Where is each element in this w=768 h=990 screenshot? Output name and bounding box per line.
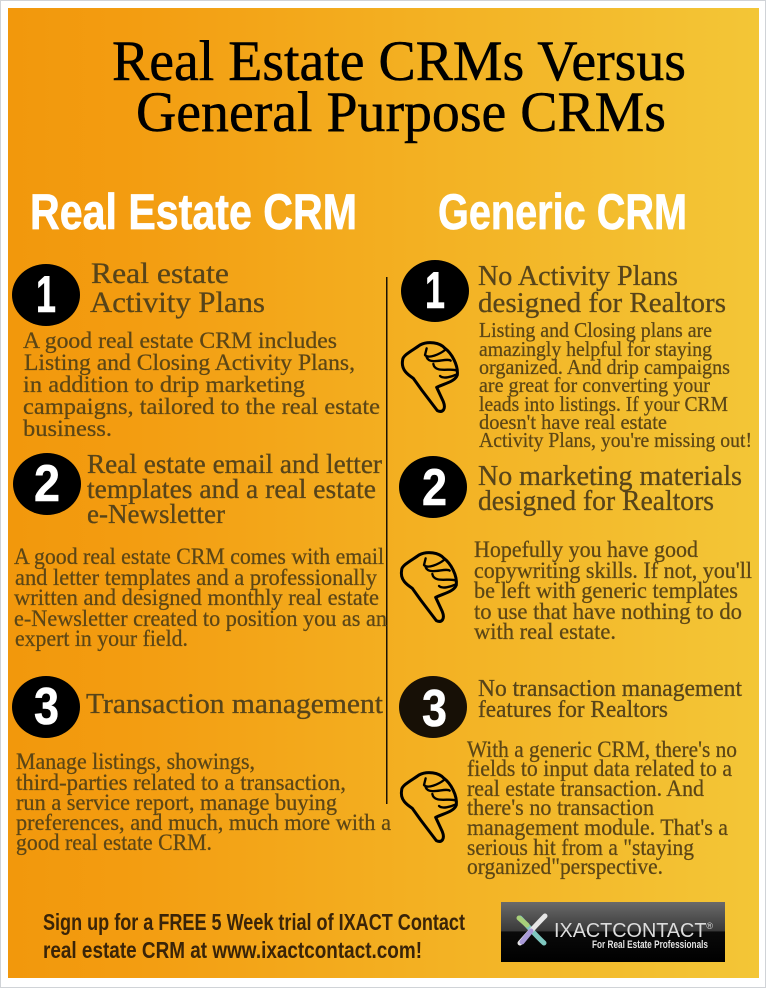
item text: expert in your field. [15, 626, 188, 651]
number badge 3 [12, 676, 80, 738]
item text: doesn't have real estate [479, 410, 667, 434]
item text: and letter templates and a professionally [15, 565, 377, 590]
item heading [90, 257, 265, 319]
item text: there's no transaction [467, 795, 654, 820]
item text: with real estate. [474, 619, 616, 644]
panel: real estate item 3 [12, 676, 391, 855]
panel: generic item 2 [399, 456, 752, 644]
item text: run a service report, manage buying [16, 790, 337, 815]
item text [16, 749, 391, 855]
item text: organized. And drip campaigns [479, 355, 730, 379]
item text: With a generic CRM, there's no [467, 737, 737, 762]
footer call to action: Sign up for a FREE 5 Week trial of IXACT Contact [43, 909, 465, 935]
item heading: templates and a real estate [87, 474, 376, 504]
item text: leads into listings. If your CRM [479, 392, 728, 416]
item heading: No marketing materials [478, 461, 742, 492]
item heading: designed for Realtors [478, 287, 726, 319]
number badge 3: 3 [422, 680, 447, 738]
item text: organized"perspective. [467, 854, 663, 879]
title: Real Estate CRMs Versus [112, 30, 686, 93]
item text: serious hit from a "staying [467, 835, 694, 860]
heading: Real Estate CRM: Real Estate CRM [30, 184, 357, 240]
panel: generic item 3 [399, 676, 742, 879]
item text [467, 737, 737, 879]
icon: colored X mark [519, 916, 545, 943]
item text: good real estate CRM. [16, 830, 212, 855]
item text: are great for converting your [479, 373, 710, 397]
icon: thumbs down [401, 553, 456, 621]
item text [474, 537, 752, 644]
item text: real estate transaction. And [467, 776, 704, 801]
item heading: e-Newsletter [87, 499, 225, 529]
icon: thumbs down [402, 343, 457, 411]
number badge 2: 2 [422, 459, 447, 517]
item text: in addition to drip marketing [23, 372, 306, 397]
footer call to action [43, 909, 465, 963]
item text: e-Newsletter created to position you as an [14, 606, 387, 631]
item text: Listing and Closing Activity Plans, [24, 350, 355, 375]
item text: business. [23, 416, 112, 441]
panel: generic item 1 [401, 260, 752, 452]
logo: IXACT Contact: IXACTCONTACT [554, 920, 708, 942]
item heading [478, 676, 742, 723]
number badge 1 [12, 264, 80, 326]
number badge 1 [401, 260, 469, 322]
number badge 2 [399, 456, 467, 518]
item text: Manage listings, showings, [16, 749, 255, 774]
number badge 1: 1 [36, 266, 56, 324]
item text: A good real estate CRM includes [23, 328, 337, 353]
number badge 1: 1 [425, 262, 445, 320]
panel: real estate item 2 [13, 449, 387, 651]
item heading: No Activity Plans [478, 260, 678, 292]
item text: third-parties related to a transaction, [16, 770, 346, 795]
item text: preferences, and much, much more with a [16, 810, 391, 835]
item heading: designed for Realtors [478, 486, 714, 517]
item heading [478, 260, 726, 319]
title [112, 30, 686, 144]
number badge 2: 2 [34, 455, 60, 513]
center divider line [386, 277, 388, 804]
item text [479, 318, 752, 452]
item heading: features for Realtors [478, 697, 668, 723]
panel: real estate item 1 [12, 257, 380, 441]
item heading [478, 461, 742, 517]
item text: copywriting skills. If not, you'll [474, 558, 752, 583]
item heading: No transaction management [478, 676, 742, 702]
item text: Hopefully you have good [474, 537, 698, 562]
item text [14, 544, 387, 651]
number badge 3: 3 [34, 678, 59, 736]
item text: be left with generic templates [474, 578, 738, 603]
item heading: Real estate email and letter [87, 449, 382, 479]
icon: thumbs down [401, 773, 456, 841]
number badge 2 [13, 453, 81, 515]
number badge 3 [399, 676, 467, 738]
item heading: Real estate [91, 257, 229, 290]
item text: amazingly helpful for staying [479, 337, 712, 361]
item text: campaigns, tailored to the real estate [23, 394, 380, 419]
item text: written and designed monthly real estate [14, 585, 379, 610]
item heading: Transaction management [86, 689, 383, 720]
footer call to action: real estate CRM at www.ixactcontact.com! [43, 937, 422, 963]
logo: IXACT Contact [501, 902, 725, 962]
item heading [87, 449, 382, 529]
logo: IXACT Contact: For Real Estate Professionals [592, 939, 708, 951]
item heading: Activity Plans [90, 286, 265, 319]
item text [23, 328, 380, 441]
item text: Listing and Closing plans are [479, 318, 712, 342]
item text: fields to input data related to a [467, 756, 732, 781]
logo: IXACT Contact: ® [706, 921, 713, 931]
item text: management module. That's a [467, 815, 728, 840]
item text: A good real estate CRM comes with email [14, 544, 384, 569]
item text: to use that have nothing to do [474, 599, 742, 624]
heading: Generic CRM: Generic CRM [438, 184, 687, 240]
title: General Purpose CRMs [136, 81, 666, 144]
